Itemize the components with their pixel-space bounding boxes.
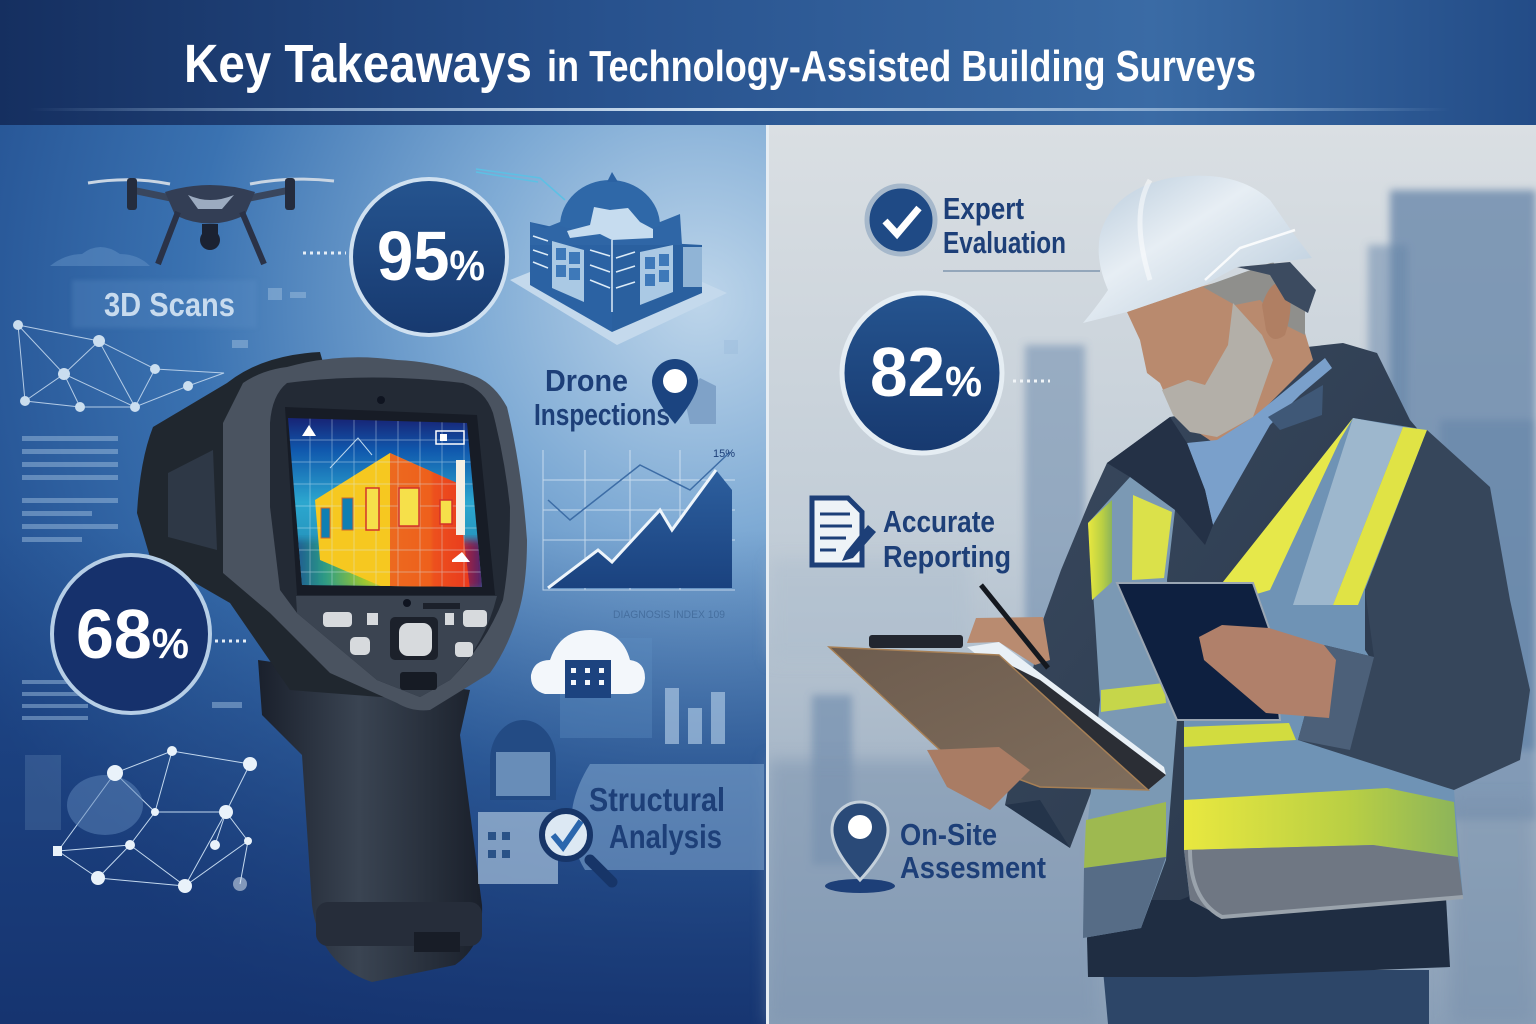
label: Drone Inspections: Inspections: [534, 397, 670, 432]
small chart caption: DIAGNOSIS INDEX 109: [613, 609, 725, 621]
surveyor figure: [829, 176, 1530, 1024]
icon: magnifier with check: [542, 811, 612, 882]
label: Accurate Reporting: Reporting: [883, 539, 1011, 574]
label: Drone Inspections: [534, 363, 670, 432]
shirt collar knit: [1268, 385, 1323, 430]
panel: left technology background: [0, 125, 768, 1024]
header band: [0, 0, 1536, 125]
label: Expert Evaluation: Expert: [943, 191, 1024, 226]
safety vest left panel: [1083, 477, 1177, 938]
title: [184, 34, 1256, 94]
ear: [1262, 282, 1291, 339]
tablet hand: [1199, 625, 1336, 718]
jacket body and left sleeve: [1005, 343, 1427, 900]
icon: domed building: [478, 720, 558, 884]
jacket cuff: [1298, 645, 1374, 750]
camera handle: [258, 660, 482, 982]
hair: [1203, 262, 1305, 335]
label: Drone Inspections: Drone: [545, 363, 628, 398]
clipboard hand: [927, 747, 1030, 810]
label: Expert Evaluation: [943, 191, 1100, 271]
icon: cloud building: [531, 630, 725, 744]
camera rear body: [137, 352, 420, 700]
tablet: [1117, 583, 1280, 720]
label: Expert Evaluation: Evaluation: [943, 225, 1066, 260]
icon: expert check badge: [867, 186, 935, 254]
stat circle: 82%: [842, 293, 1002, 453]
label: Structural Analysis: Analysis: [609, 818, 722, 855]
clipboard: [829, 635, 1166, 790]
connector dots 95: [303, 252, 346, 254]
label: On-Site Assesment: [900, 817, 1046, 885]
label: Structural Analysis: [571, 764, 764, 870]
camera screen: [285, 415, 485, 590]
stat circle: 82%: 82%: [870, 333, 982, 411]
label: Accurate Reporting: Accurate: [883, 504, 995, 539]
icon: location pin: [652, 359, 716, 424]
jeans: [1103, 970, 1429, 1024]
jacket hem: [1086, 880, 1450, 977]
beard: [1162, 303, 1273, 437]
icon: map pin: [825, 802, 895, 893]
icon: 3D building: [476, 169, 727, 345]
stat circle: 68%: 68%: [76, 595, 189, 673]
stat circle: 68%: [52, 555, 210, 713]
right sleeve: [1298, 430, 1530, 790]
hard hat: [1083, 176, 1312, 323]
label: 3D Scans: [72, 280, 257, 328]
icon: report document: [812, 498, 876, 565]
label: On-Site Assesment: Assesment: [900, 850, 1046, 885]
neck and face: [1127, 267, 1313, 445]
network graph top-left: [13, 320, 224, 412]
label: Accurate Reporting: [883, 504, 1011, 574]
panel divider: [766, 125, 769, 1024]
network graph bottom-left: [53, 746, 257, 893]
label: 3D Scans: 3D Scans: [104, 286, 235, 323]
jacket collar left: [1107, 417, 1213, 545]
line chart: 15%: [713, 448, 735, 460]
title: Key Takeaways: [184, 34, 532, 94]
icon: faded cloud: [50, 247, 150, 266]
stat circle: 95%: [351, 179, 507, 335]
shirt: [1187, 358, 1332, 525]
line chart: [543, 448, 735, 590]
title: in Technology-Assisted Building Surveys: [547, 42, 1256, 91]
camera main body: [223, 357, 527, 710]
header rule: [30, 108, 1450, 111]
label: On-Site Assesment: On-Site: [900, 817, 997, 852]
connector dots 82: [1013, 380, 1050, 382]
left forearm cuff: [1005, 800, 1070, 848]
panel: right on-site background: [768, 125, 1536, 1024]
label: Structural Analysis: Structural: [589, 781, 725, 818]
stat circle: 95%: 95%: [377, 217, 485, 295]
camera controls: [323, 599, 487, 690]
writing hand with pen: [967, 585, 1050, 668]
decorative data text blocks: [22, 288, 738, 830]
icon: drone: [88, 178, 334, 264]
thermal camera: [137, 352, 527, 982]
safety vest right panel: [1184, 418, 1463, 917]
hard hat strap: [1237, 262, 1316, 313]
connector dots 68: [215, 640, 250, 642]
